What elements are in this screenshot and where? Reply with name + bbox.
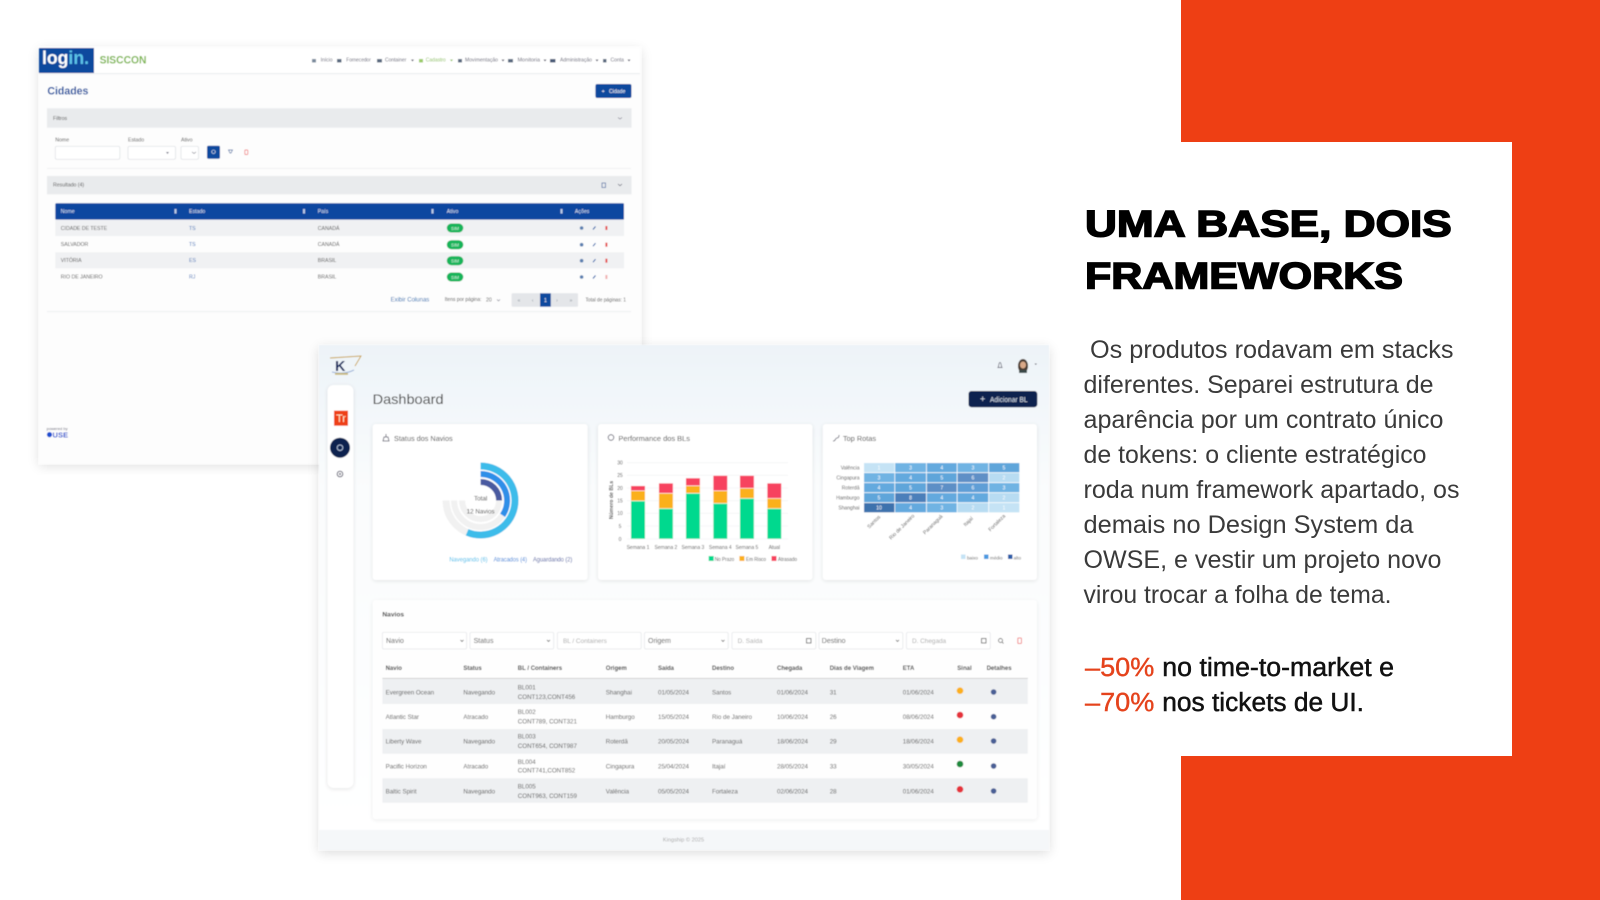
stacked bar chart: 20: [617, 486, 623, 492]
heatmap: Rio de Janeiro: [888, 513, 916, 541]
results section bar: [47, 176, 632, 194]
cities table: BRASIL: [318, 275, 336, 281]
ships table: Chegada: [777, 666, 803, 672]
ships table: [382, 666, 1028, 803]
app header: Conta: [610, 58, 625, 64]
row: Baltic Spirit: [386, 784, 996, 800]
result statement: no time-to-market e: [1162, 654, 1394, 682]
heatmap: Valência: [841, 466, 860, 472]
heatmap: 2: [1003, 476, 1006, 482]
heatmap: 6: [972, 486, 975, 492]
heatmap: 6: [972, 476, 975, 482]
heatmap: 8: [909, 496, 912, 502]
app header: Fornecedor: [346, 58, 371, 64]
add BL button: [968, 391, 1037, 407]
result statement: –70%: [1085, 689, 1154, 717]
stacked bar chart: 0: [619, 537, 622, 543]
row: Pacific Horizon: [386, 759, 996, 774]
page title: Cidades: [47, 86, 88, 98]
row: Atlantic Star: CONT789, CONT321: [518, 718, 578, 726]
stacked bar chart: [609, 460, 788, 551]
bar legend: [709, 556, 797, 563]
row: Baltic Spirit: Baltic Spirit: [386, 788, 417, 796]
row: Pacific Horizon: Itajaí: [712, 763, 726, 770]
heading: UMA BASE, DOIS: [1085, 204, 1452, 244]
heading: [1085, 204, 1452, 296]
sidebar: Tr: [336, 413, 346, 425]
row: Atlantic Star: Rio de Janeiro: [712, 714, 752, 721]
cities table: CANADÁ: [318, 225, 340, 232]
heatmap: 4: [940, 466, 943, 472]
heatmap: 3: [878, 476, 881, 482]
body paragraph: virou trocar a folha de tema.: [1084, 581, 1392, 609]
body paragraph: [1084, 336, 1460, 609]
heading: FRAMEWORKS: [1085, 256, 1403, 296]
row: Atlantic Star: 10/06/2024: [777, 714, 809, 721]
cities table: Nome: [61, 209, 75, 215]
ships table: BL / Containers: [518, 666, 563, 672]
filter controls: [382, 632, 1021, 649]
heatmap: 4: [909, 506, 912, 512]
cities table: SIM: [451, 258, 459, 264]
row: Pacific Horizon: 25/04/2024: [658, 763, 690, 770]
cities table: TS: [189, 226, 196, 232]
cities table: RIO DE JANEIRO: [61, 275, 103, 281]
heatmap: Paranaguá: [922, 514, 944, 536]
bar legend: Atrasado: [778, 557, 797, 563]
add button: [595, 84, 632, 98]
app header: Cadastro: [426, 58, 446, 64]
heatmap: 3: [909, 466, 912, 472]
ships table: Saída: [658, 666, 675, 672]
row: Evergreen Ocean: BL001: [518, 684, 536, 692]
cities table: Ações: [575, 209, 590, 215]
filter controls: Destino: [822, 638, 846, 645]
heatmap: 3: [940, 506, 943, 512]
row: Pacific Horizon: 28/05/2024: [777, 763, 809, 770]
ships table: ETA: [903, 666, 915, 672]
row: Pacific Horizon: Cingapura: [606, 763, 635, 770]
stacked bar chart: Semana 2: [655, 545, 678, 551]
app header: Início: [321, 58, 333, 64]
sidebar: [328, 385, 354, 789]
heatmap legend: médio: [990, 555, 1003, 560]
body paragraph: demais no Design System da: [1084, 511, 1414, 539]
heatmap: 3: [1003, 486, 1006, 492]
chart centre total: [467, 496, 495, 516]
cities table: CANADÁ: [318, 241, 340, 248]
row: Atlantic Star: Atracado: [463, 714, 489, 721]
heatmap: 5: [909, 486, 912, 492]
orange background block: [1181, 0, 1600, 900]
app header: Container: [385, 58, 406, 64]
heatmap: 2: [1003, 496, 1006, 502]
row: Baltic Spirit: Valência: [606, 788, 630, 796]
cities table: RJ: [189, 275, 196, 281]
stacked bar chart: 30: [617, 460, 623, 466]
row: Liberty Wave: BL003: [518, 734, 536, 740]
cities table: ES: [189, 258, 196, 264]
cities table: CIDADE DE TESTE: [61, 226, 108, 232]
ships table: Status: [463, 666, 482, 672]
heatmap: 1: [878, 466, 881, 472]
row: Pacific Horizon: 33: [830, 763, 837, 770]
heatmap: 2: [972, 506, 975, 512]
heatmap legend: [961, 554, 1021, 560]
section heading: Navios: [382, 612, 404, 619]
powered by OWSE logo: [47, 427, 68, 439]
app header: SISCCON: [100, 54, 146, 66]
pagination row: Exibir Colunas: [391, 297, 430, 304]
row: Atlantic Star: 26: [830, 714, 837, 721]
heatmap: 7: [940, 486, 943, 492]
stacked bar chart: Semana 1: [627, 545, 650, 551]
pagination row: ‹: [532, 298, 534, 304]
result statement: nos tickets de UI.: [1162, 689, 1364, 717]
user controls: [998, 359, 1037, 373]
row: Evergreen Ocean: Evergreen Ocean: [386, 689, 435, 696]
pagination row: Itens por página:: [445, 297, 482, 303]
filter controls: BL / Containers: [563, 638, 607, 645]
cities table: Ativo: [447, 209, 458, 215]
pagination row: »: [570, 298, 573, 304]
row: Liberty Wave: Navegando: [463, 738, 496, 746]
results section bar: Resultado (4): [53, 182, 84, 188]
row: Pacific Horizon: BL004: [518, 759, 536, 766]
heatmap: 5: [940, 476, 943, 482]
row: Evergreen Ocean: 01/05/2024: [658, 689, 690, 696]
pagination row: Total de páginas: 1: [586, 298, 626, 304]
row: Pacific Horizon: CONT741,CONT852: [518, 768, 576, 774]
app footer: Kingship © 2025: [663, 837, 704, 844]
ships table: Dias de Viagem: [830, 666, 874, 672]
bar legend: No Prazo: [715, 557, 734, 563]
row: Liberty Wave: Paranaguá: [712, 738, 743, 746]
chart legend: Atracados (4): [494, 557, 527, 564]
row: Liberty Wave: 18/06/2024: [903, 738, 934, 746]
row: Evergreen Ocean: 01/06/2024: [777, 689, 809, 696]
heatmap: Roterdã: [842, 486, 860, 492]
row: Atlantic Star: 15/05/2024: [658, 714, 690, 721]
body paragraph: diferentes. Separei estrutura de: [1084, 371, 1434, 399]
app header: Administração: [560, 58, 592, 64]
result statement: [1085, 654, 1394, 717]
body paragraph: Os produtos rodavam em stacks: [1090, 336, 1454, 364]
chart legend: Aguardando (2): [533, 557, 572, 564]
heatmap: 3: [972, 466, 975, 472]
row: Baltic Spirit: 05/05/2024: [658, 788, 690, 796]
card heading: Status dos Navios: [394, 434, 453, 443]
pagination row: ›: [556, 298, 558, 304]
filter controls: Navio: [386, 638, 404, 645]
cities table: SIM: [451, 242, 459, 248]
ships table: Destino: [712, 666, 734, 672]
row: Baltic Spirit: Fortaleza: [712, 788, 738, 796]
row: Liberty Wave: Liberty Wave: [386, 738, 422, 746]
stacked bar chart: Semana 4: [709, 545, 732, 551]
pagination row: 20: [486, 298, 492, 304]
filter controls: Status: [474, 638, 494, 645]
radial ring chart: [446, 466, 515, 535]
row: Liberty Wave: Roterdã: [606, 738, 628, 746]
card heading: Top Rotas: [843, 434, 876, 443]
body paragraph: de tokens: o cliente estratégico: [1084, 441, 1426, 469]
cities table: VITÓRIA: [61, 257, 82, 264]
row: Evergreen Ocean: Santos: [712, 689, 731, 696]
filters section: Estado: [128, 138, 144, 144]
heatmap: 5: [878, 496, 881, 502]
row: Liberty Wave: 29: [830, 738, 837, 746]
heatmap: Hamburgo: [836, 496, 860, 502]
add BL button: Adicionar BL: [990, 397, 1028, 404]
row: Baltic Spirit: 01/06/2024: [903, 788, 934, 796]
heatmap: 5: [1003, 466, 1006, 472]
row: Atlantic Star: BL002: [518, 709, 536, 716]
row: Atlantic Star: 08/06/2024: [903, 714, 934, 721]
dashboard title: Dashboard: [373, 391, 444, 407]
filters section: Filtros: [53, 116, 68, 122]
row: Baltic Spirit: Navegando: [463, 788, 496, 796]
filter controls: D. Chegada: [912, 638, 947, 645]
cities table: SIM: [451, 275, 459, 280]
body paragraph: aparência por um contrato único: [1084, 406, 1444, 434]
heatmap: Fortaleza: [988, 513, 1007, 533]
heatmap: 4: [940, 496, 943, 502]
filters section: Nome: [55, 138, 69, 144]
row: Evergreen Ocean: Navegando: [463, 689, 496, 696]
result statement: –50%: [1085, 654, 1154, 682]
heatmap: Shanghai: [838, 506, 860, 512]
panel: Kingship dashboard screenshot: [319, 345, 1049, 853]
cities table: Estado: [189, 209, 205, 215]
panel: Navios table: [373, 600, 1037, 820]
heatmap: Itajaí: [963, 516, 975, 528]
cities table: TS: [189, 242, 196, 248]
cities table: País: [318, 209, 329, 215]
cities table: [55, 203, 624, 282]
card heading: Performance dos BLs: [618, 434, 690, 443]
row: Evergreen Ocean: CONT123,CONT456: [518, 694, 576, 701]
add BL button: +: [980, 394, 985, 404]
row: Liberty Wave: [386, 734, 996, 750]
panel: Performance dos BLs: [598, 424, 812, 581]
stacked bar chart: 25: [617, 473, 623, 479]
row: Baltic Spirit: 02/06/2024: [777, 788, 809, 796]
body paragraph: OWSE, e vestir um projeto novo: [1084, 546, 1442, 574]
powered by OWSE logo: USE: [52, 430, 68, 439]
Kingship logo: K: [335, 359, 346, 375]
cities table: SIM: [451, 226, 459, 231]
row: Baltic Spirit: BL005: [518, 784, 536, 790]
row: Baltic Spirit: CONT963, CONT159: [518, 793, 578, 800]
stacked bar chart: 5: [619, 524, 622, 530]
heatmap: 4: [909, 476, 912, 482]
heatmap: 10: [876, 506, 882, 512]
add button: + Cidade: [602, 89, 626, 95]
ships table: Origem: [606, 666, 627, 672]
cities table: BRASIL: [318, 258, 336, 264]
app header: Monitoria: [518, 58, 541, 64]
chart legend: [449, 557, 572, 564]
body paragraph: roda num framework apartado, os: [1084, 476, 1460, 504]
filter controls: D. Saída: [738, 638, 763, 645]
pagination row: 1: [544, 298, 547, 304]
row: Pacific Horizon: 30/05/2024: [903, 763, 934, 770]
row: Evergreen Ocean: Shanghai: [606, 689, 632, 696]
chart centre total: Total: [474, 496, 487, 502]
pagination row: «: [518, 298, 521, 304]
ships table: Navio: [386, 666, 402, 672]
heatmap: [836, 463, 1020, 541]
filters section: Ativo: [181, 138, 193, 144]
pagination row: [391, 293, 626, 307]
row: Liberty Wave: 20/05/2024: [658, 738, 690, 746]
app header: login.: [42, 47, 89, 68]
row: Baltic Spirit: 28: [830, 788, 837, 796]
panel: Top Rotas: [823, 424, 1037, 581]
row: Evergreen Ocean: 01/06/2024: [903, 689, 934, 696]
heatmap: Cingapura: [836, 476, 860, 482]
stacked bar chart: 15: [617, 498, 623, 504]
heatmap legend: alto: [1014, 555, 1021, 560]
app header: Movimentação: [465, 58, 498, 64]
panel: Cidades screenshot: [39, 47, 641, 466]
heatmap: 4: [878, 486, 881, 492]
row: Liberty Wave: 18/06/2024: [777, 738, 809, 746]
stacked bar chart: Semana 5: [736, 545, 759, 551]
powered by OWSE logo: powered by: [47, 427, 68, 431]
app footer: [319, 830, 1049, 850]
cities table: SALVADOR: [61, 242, 89, 248]
row: Evergreen Ocean: 31: [830, 689, 837, 696]
row: Atlantic Star: [386, 709, 996, 726]
chart legend: Navegando (6): [449, 557, 488, 564]
row: Atlantic Star: Hamburgo: [606, 714, 635, 721]
white text panel: [1040, 142, 1512, 756]
stacked bar chart: Atual: [769, 545, 780, 551]
ships table: Detalhes: [987, 666, 1012, 672]
heatmap legend: baixo: [967, 555, 978, 560]
row: Liberty Wave: CONT654, CONT987: [518, 743, 578, 750]
stacked bar chart: Número de BLs: [609, 481, 615, 519]
heatmap: 1: [1003, 506, 1006, 512]
heatmap: 4: [972, 496, 975, 502]
Kingship logo: [330, 356, 361, 375]
app header: [39, 47, 640, 74]
row: Pacific Horizon: Pacific Horizon: [386, 763, 427, 770]
row: Evergreen Ocean: [386, 684, 996, 701]
ships table: Sinal: [957, 666, 972, 672]
filter controls: Origem: [648, 638, 671, 645]
row: Atlantic Star: Atlantic Star: [386, 714, 419, 721]
stacked bar chart: Semana 3: [682, 545, 705, 551]
heatmap: Santos: [866, 514, 882, 530]
filters section: [47, 108, 632, 159]
panel: Status dos Navios: [373, 424, 588, 581]
stacked bar chart: 10: [617, 511, 623, 517]
chart centre total: 12 Navios: [467, 508, 495, 516]
row: Pacific Horizon: Atracado: [463, 763, 489, 770]
bar legend: Em Risco: [746, 557, 766, 563]
